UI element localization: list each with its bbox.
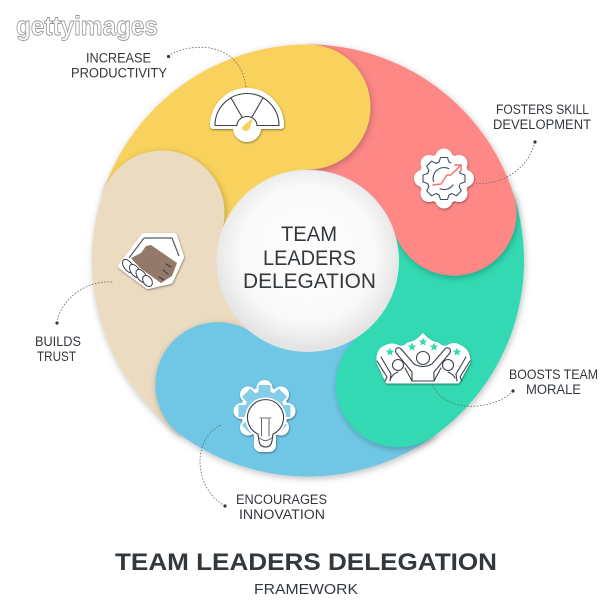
center heading: LEADERS bbox=[263, 246, 356, 270]
label: boosts team morale: MORALE bbox=[526, 382, 581, 397]
subtitle: FRAMEWORK bbox=[254, 581, 358, 598]
panel: builds trust head overlapping yellow bbox=[93, 149, 229, 239]
icon: light bulb with gear bbox=[234, 380, 296, 452]
title: TEAM LEADERS DELEGATION bbox=[115, 549, 497, 576]
label: encourages innovation: INNOVATION bbox=[239, 507, 325, 522]
icon: handshake bbox=[120, 236, 181, 288]
panel: increase productivity segment bbox=[103, 44, 370, 232]
panel: encourages innovation segment bbox=[130, 247, 458, 556]
panel: builds trust segment bbox=[39, 134, 301, 447]
arrow: builds trust leader bbox=[55, 282, 113, 325]
label: encourages innovation bbox=[236, 492, 327, 522]
arrow: encourages innovation leader bbox=[200, 425, 227, 508]
panel: fosters skill development segment bbox=[271, 0, 533, 311]
arrow: boosts morale leader bbox=[432, 384, 515, 406]
label: fosters skill development: FOSTERS SKILL bbox=[496, 102, 589, 117]
icon: gauge bbox=[211, 89, 283, 141]
icon: gear with growth arrow bbox=[414, 148, 474, 208]
label: fosters skill development: DEVELOPMENT bbox=[493, 117, 591, 132]
arrow: increase productivity leader bbox=[167, 47, 246, 87]
label: increase productivity bbox=[71, 50, 167, 80]
label: boosts team morale bbox=[509, 367, 598, 397]
arrow: fosters skill leader bbox=[476, 140, 537, 183]
center circle bbox=[216, 170, 398, 352]
label: increase productivity: PRODUCTIVITY bbox=[71, 66, 167, 80]
label: boosts team morale: BOOSTS TEAM bbox=[509, 367, 598, 382]
label: fosters skill development bbox=[493, 102, 591, 132]
icon: team celebrating with stars bbox=[377, 335, 470, 382]
center heading bbox=[243, 222, 376, 293]
panel: boosts team morale segment bbox=[274, 163, 601, 472]
label: increase productivity: INCREASE bbox=[86, 50, 151, 66]
center heading: TEAM bbox=[281, 222, 337, 246]
label: builds trust: TRUST bbox=[37, 349, 76, 364]
watermark: gettyimages: gettyimages bbox=[16, 11, 158, 41]
label: builds trust: BUILDS bbox=[35, 334, 81, 349]
center heading: DELEGATION bbox=[243, 269, 376, 293]
label: builds trust bbox=[35, 334, 81, 364]
label: encourages innovation: ENCOURAGES bbox=[236, 492, 327, 507]
